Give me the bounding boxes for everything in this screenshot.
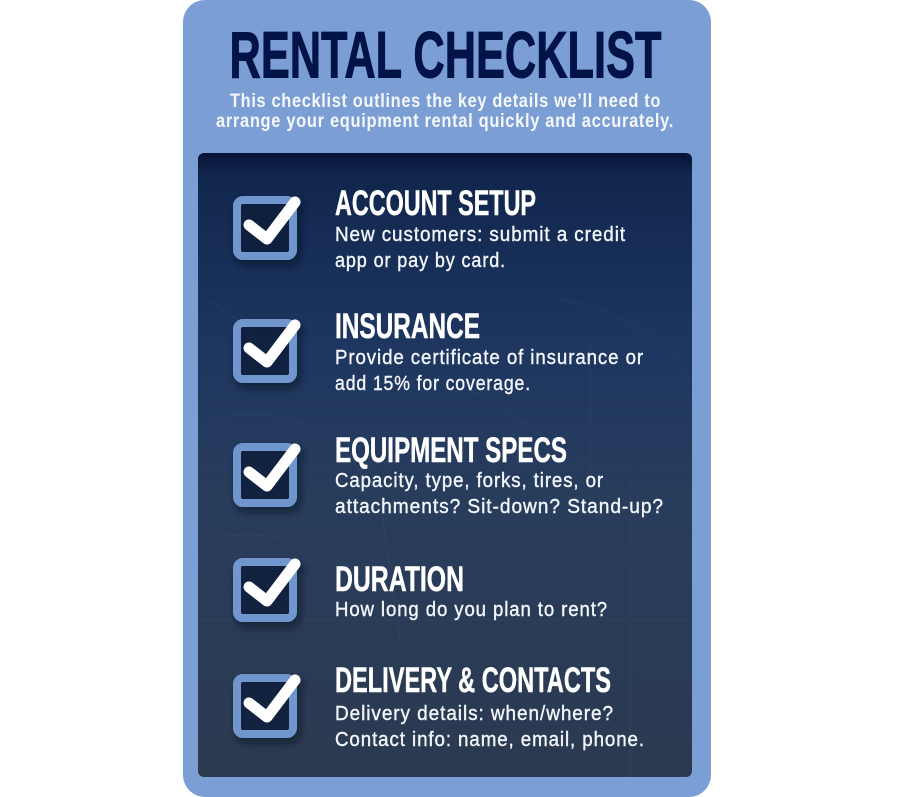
item: duration	[237, 560, 608, 621]
icon: checked box	[237, 678, 295, 734]
body text: Provide certificate of insurance or	[335, 346, 644, 369]
body text: attachments? Sit-down? Stand-up?	[335, 495, 664, 518]
body text: New customers: submit a credit	[335, 223, 626, 246]
heading: EQUIPMENT SPECS	[335, 431, 567, 470]
item: delivery and contacts	[237, 661, 645, 751]
heading: INSURANCE	[335, 307, 480, 346]
icon: checked box	[237, 447, 295, 503]
heading: DELIVERY & CONTACTS	[335, 661, 611, 700]
outer blue card	[183, 0, 711, 797]
body text: Capacity, type, forks, tires, or	[335, 469, 604, 492]
title: RENTAL CHECKLIST	[230, 18, 662, 92]
item: equipment specs	[237, 431, 664, 518]
body text	[335, 702, 645, 751]
icon: checked box	[237, 323, 295, 379]
heading: ACCOUNT SETUP	[335, 184, 536, 223]
body text	[335, 346, 644, 395]
body text: Delivery details: when/where?	[335, 702, 614, 725]
item: account setup	[237, 184, 626, 272]
subtitle	[216, 90, 674, 132]
icon: checked box	[237, 562, 295, 618]
body text	[335, 223, 626, 272]
heading: DURATION	[335, 560, 464, 599]
body text: app or pay by card.	[335, 249, 506, 272]
body text: add 15% for coverage.	[335, 372, 531, 395]
item: insurance	[237, 307, 644, 395]
subtitle: This checklist outlines the key details we’ll need to	[230, 90, 661, 112]
icon: checked box	[237, 200, 295, 256]
dark panel	[198, 153, 692, 777]
body text: Contact info: name, email, phone.	[335, 728, 645, 751]
subtitle: arrange your equipment rental quickly and accurately.	[216, 110, 674, 132]
body text: How long do you plan to rent?	[335, 598, 608, 621]
body text	[335, 469, 664, 518]
